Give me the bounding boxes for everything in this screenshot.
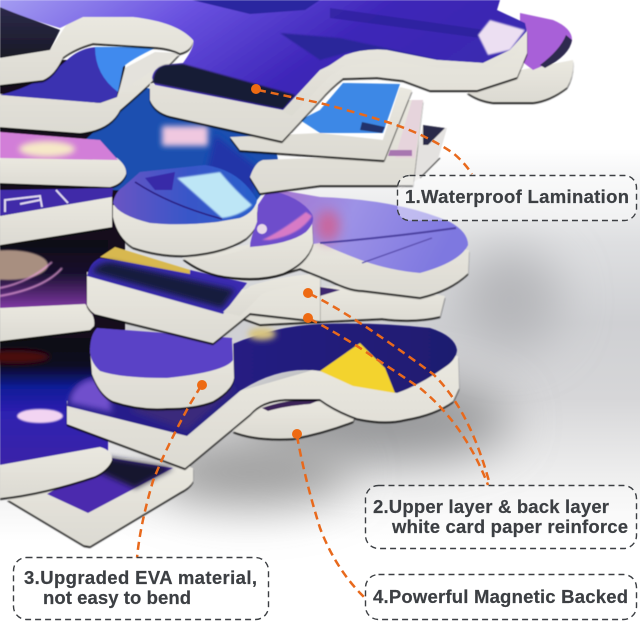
piece: top large [0, 0, 527, 141]
piece: main lower with yellow triangle [67, 324, 459, 468]
callout 2 leader lines [303, 288, 490, 485]
piece: magnetic bottom [233, 400, 360, 438]
piece: centre with yellow strip [87, 247, 320, 343]
piece: top left lower, blue art [0, 47, 180, 133]
callout box 4: Powerful Magnetic Backed [366, 574, 636, 620]
piece: lower left foam [0, 447, 112, 498]
callout 3 leader line [137, 380, 207, 558]
piece: stacked right under top, pale pink [250, 100, 423, 193]
callout box 3: Upgraded EVA material: 3.Upgraded EVA material, [24, 567, 257, 588]
piece: small purple lobe foam [183, 190, 313, 278]
puzzle photo: stacked foam pieces [0, 0, 573, 546]
callout box 2: white card paper reinforce [366, 486, 636, 548]
callout box 2: white card paper reinforce: white card paper reinforce [391, 516, 628, 537]
callout box 4: Powerful Magnetic Backed: 4.Powerful Magnetic Backed [373, 586, 628, 607]
piece: stacked right blue [230, 83, 412, 160]
piece: lilac right [183, 190, 469, 297]
back piece top right small [400, 125, 447, 190]
piece: bottom left [7, 456, 193, 546]
callout box 1: Waterproof Lamination [398, 176, 636, 220]
central blue art with glow [85, 87, 280, 200]
left dark art region [0, 60, 125, 468]
piece: left middle foam [0, 304, 94, 341]
piece: round purple tab [90, 328, 234, 408]
callout box 3: Upgraded EVA material [14, 558, 268, 620]
piece: rear right purple lobe [467, 13, 573, 102]
callout 1 leader line [251, 84, 472, 174]
callout box 1: Waterproof Lamination: 1.Waterproof Lamination [405, 186, 629, 207]
piece: right strip behind lilac piece [230, 285, 445, 324]
piece: top left dark with foam knob [0, 7, 193, 85]
callout 4 leader line [292, 429, 365, 598]
callout box 3: Upgraded EVA material: not easy to bend [43, 587, 191, 608]
callout box 2: white card paper reinforce: 2.Upper layer & back layer [373, 496, 609, 517]
piece: left with icon lines [0, 188, 113, 245]
piece: round centre tab [113, 165, 257, 255]
piece: left pink [0, 132, 126, 187]
